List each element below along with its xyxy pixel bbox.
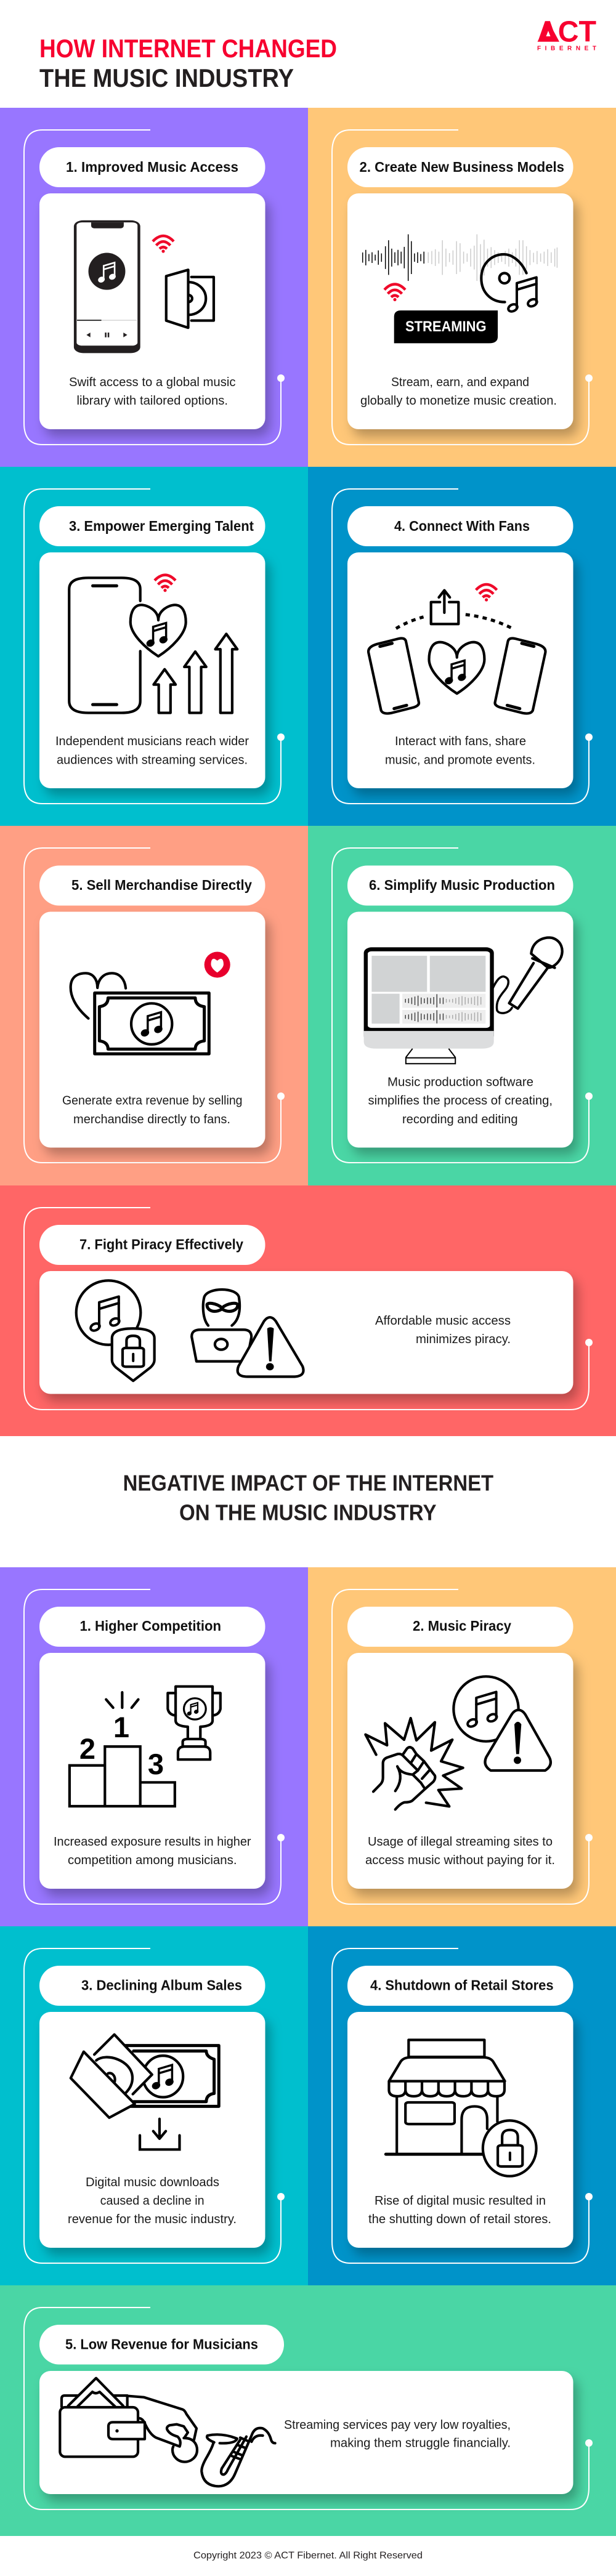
description: Digital music downloads — [86, 2175, 219, 2189]
card — [347, 1653, 573, 1889]
description: minimizes piracy. — [416, 1332, 511, 1346]
description — [69, 375, 235, 408]
icon: music note — [89, 1296, 121, 1332]
description: caused a decline in — [100, 2194, 205, 2208]
description: access music without paying for it. — [365, 1853, 555, 1867]
panel background — [0, 467, 308, 826]
card — [347, 552, 573, 788]
icon: music note — [507, 277, 538, 313]
description: making them struggle financially. — [330, 2436, 511, 2450]
card — [39, 1271, 573, 1394]
heading pill — [347, 506, 573, 546]
heading: 7. Fight Piracy Effectively — [79, 1237, 243, 1253]
heading: 6. Simplify Music Production — [369, 877, 555, 893]
heading: 2. Create New Business Models — [360, 159, 564, 175]
panel background — [308, 1567, 616, 1926]
connector line — [24, 130, 285, 445]
podium numbers — [79, 1711, 164, 1780]
icon: music note — [152, 2065, 173, 2089]
panel background — [0, 108, 308, 467]
description: Stream, earn, and expand — [391, 375, 529, 389]
panel: 3. Empower Emerging Talent — [0, 467, 308, 826]
icon: music note on phone — [98, 262, 116, 283]
podium numbers: 3 — [148, 1748, 164, 1780]
description — [368, 1075, 553, 1126]
panel background — [0, 1926, 308, 2285]
icon: CD case, banknote and download — [71, 2035, 219, 2149]
connector line — [24, 2307, 593, 2509]
icon: podium and trophy — [70, 1687, 221, 1806]
description — [284, 2418, 511, 2450]
description: merchandise directly to fans. — [73, 1112, 230, 1126]
description: the shutting down of retail stores. — [368, 2212, 551, 2226]
description: Streaming services pay very low royalties, — [284, 2418, 511, 2432]
heading: 1. Higher Competition — [80, 1618, 221, 1634]
card — [39, 2371, 573, 2494]
icon: CD case — [166, 270, 214, 328]
description — [54, 1835, 251, 1867]
description: Independent musicians reach wider — [55, 734, 249, 748]
copyright footer: Copyright 2023 © ACT Fibernet. All Right Reserved — [193, 2551, 423, 2561]
panel: 5. Sell Merchandise Directly — [0, 826, 308, 1185]
heading pill — [347, 1966, 573, 2006]
description: audiences with streaming services. — [57, 753, 248, 767]
heading: 5. Low Revenue for Musicians — [65, 2336, 258, 2352]
heading pill — [39, 1225, 265, 1265]
connector line — [24, 848, 285, 1163]
description — [368, 2194, 551, 2226]
description: library with tailored options. — [76, 394, 228, 408]
heading pill — [39, 147, 265, 187]
icon: fist, burst, music disc and warning — [365, 1676, 551, 1809]
description — [365, 1835, 555, 1867]
connector line — [24, 1589, 285, 1904]
panel background — [308, 467, 616, 826]
panel: 2. Music Piracy — [308, 1567, 616, 1926]
icon: closed store with lock — [386, 2040, 537, 2176]
heading: 1. Improved Music Access — [66, 159, 238, 175]
podium numbers: 1 — [113, 1711, 129, 1743]
panel: 7. Fight Piracy Effectively — [0, 1185, 616, 1436]
heading: 5. Sell Merchandise Directly — [71, 877, 252, 893]
connector line — [24, 1208, 593, 1410]
heading: negative impact: ON THE MUSIC INDUSTRY — [179, 1500, 436, 1525]
heading: negative impact — [123, 1471, 493, 1525]
heading pill — [39, 506, 265, 546]
heading: 3. Empower Emerging Talent — [69, 518, 254, 534]
description — [62, 1094, 243, 1126]
card — [39, 911, 265, 1148]
title: HOW INTERNET CHANGED — [39, 34, 337, 63]
icon: music note — [466, 1692, 498, 1728]
heading pill — [347, 147, 573, 187]
card — [347, 2012, 573, 2248]
description: Music production software — [387, 1075, 533, 1089]
icon: hacker with laptop and warning — [192, 1290, 304, 1377]
description: simplifies the process of creating, — [368, 1094, 553, 1107]
connector line — [24, 1948, 285, 2263]
title — [39, 34, 337, 92]
icon: music note — [445, 661, 466, 684]
icon: wifi — [476, 584, 497, 602]
connector line — [24, 489, 285, 804]
logo: ACT Fibernet: FIBERNET — [537, 46, 596, 52]
icon: wifi — [384, 285, 405, 301]
panel: 5. Low Revenue for Musicians — [0, 2285, 616, 2536]
heading: 3. Declining Album Sales — [81, 1977, 242, 1993]
panel: 2. Create New Business Models — [308, 108, 616, 467]
panel background — [0, 1567, 308, 1926]
description: Rise of digital music resulted in — [375, 2194, 546, 2208]
heading pill — [39, 866, 265, 905]
connector line — [332, 848, 593, 1163]
heading: negative impact: NEGATIVE IMPACT OF THE INTERNET — [123, 1471, 493, 1495]
heading pill — [39, 1607, 265, 1647]
heading pill — [347, 866, 573, 905]
card — [347, 911, 573, 1148]
icon: wifi — [153, 236, 174, 253]
card — [39, 193, 265, 429]
icon: music note — [187, 1703, 198, 1716]
heading pill — [39, 1966, 265, 2006]
panel background — [0, 2285, 616, 2536]
description — [360, 375, 557, 408]
card — [39, 1653, 265, 1889]
icon: music note — [141, 1012, 162, 1036]
icon: monitor with audio editor and microphone — [364, 938, 562, 1064]
panel: 4. Connect With Fans — [308, 467, 616, 826]
heading pill — [347, 1607, 573, 1647]
description — [55, 734, 249, 767]
streaming label: STREAMING — [405, 318, 487, 335]
panel: 1. Higher Competition — [0, 1567, 308, 1926]
heading: 4. Shutdown of Retail Stores — [370, 1977, 554, 1993]
panel: 1. Improved Music Access — [0, 108, 308, 467]
connector line — [332, 1948, 593, 2263]
description — [375, 1314, 511, 1346]
icon: music disc with lock — [76, 1280, 155, 1381]
panel: 6. Simplify Music Production — [308, 826, 616, 1185]
description: Affordable music access — [375, 1314, 511, 1328]
icon: waveform, disc and streaming badge — [363, 234, 557, 343]
panel background — [308, 826, 616, 1185]
description: globally to monetize music creation. — [360, 394, 557, 408]
description: recording and editing — [402, 1112, 517, 1126]
panel background — [0, 1185, 616, 1436]
card — [39, 552, 265, 788]
card — [347, 193, 573, 429]
connector line — [332, 130, 593, 445]
panel background — [308, 108, 616, 467]
description: competition among musicians. — [68, 1853, 237, 1867]
connector line — [332, 1589, 593, 1904]
description: revenue for the music industry. — [68, 2212, 237, 2226]
heading pill — [39, 2325, 284, 2365]
connector line — [332, 489, 593, 804]
description — [68, 2175, 237, 2226]
heading: 4. Connect With Fans — [394, 518, 530, 534]
heading: 2. Music Piracy — [413, 1618, 511, 1634]
logo: ACT Fibernet: ACT — [537, 16, 596, 49]
title: THE MUSIC INDUSTRY — [39, 63, 294, 92]
podium numbers: 2 — [79, 1732, 95, 1765]
description: Generate extra revenue by selling — [62, 1094, 243, 1107]
description: music, and promote events. — [385, 753, 535, 767]
icon: banknote with heart — [71, 952, 230, 1054]
icon: wallet, hand and saxophone — [60, 2378, 275, 2486]
description: Interact with fans, share — [395, 734, 526, 748]
icon: phone with music player — [74, 220, 140, 353]
description: Swift access to a global music — [69, 375, 235, 389]
card — [39, 2012, 265, 2248]
description: Usage of illegal streaming sites to — [368, 1835, 553, 1849]
panel background — [308, 1926, 616, 2285]
icon: phone, heart and growth arrows — [69, 578, 237, 713]
icon: phones, heart and share — [368, 591, 545, 714]
description — [385, 734, 535, 767]
description: Increased exposure results in higher — [54, 1835, 251, 1849]
icon: wifi — [155, 575, 176, 592]
panel: 4. Shutdown of Retail Stores — [308, 1926, 616, 2285]
icon: music note — [147, 623, 168, 647]
panel background — [0, 826, 308, 1185]
panel: 3. Declining Album Sales — [0, 1926, 308, 2285]
